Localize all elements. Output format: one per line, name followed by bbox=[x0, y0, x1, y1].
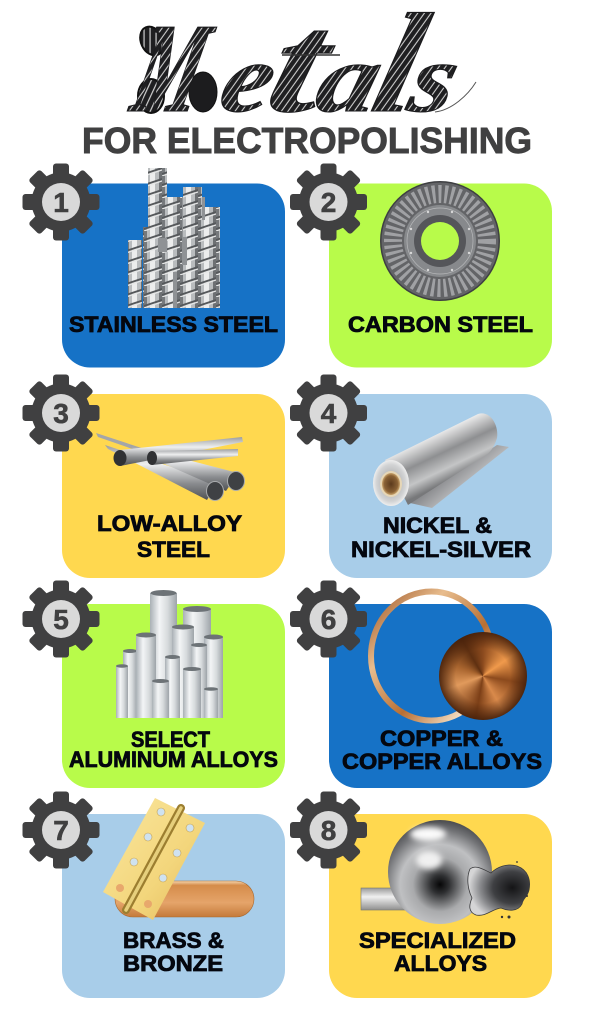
label bbox=[123, 928, 224, 976]
panel 7: brass and bronze bbox=[22, 792, 285, 998]
icon: rebar bundle bbox=[128, 168, 220, 308]
title: Metals: s bbox=[398, 23, 471, 133]
label: STEEL bbox=[137, 537, 210, 562]
label: ALLOYS bbox=[394, 951, 487, 976]
label: STAINLESS STEEL bbox=[69, 312, 278, 337]
label: SPECIALIZED bbox=[359, 928, 516, 953]
panel 2: carbon steel bbox=[290, 164, 552, 368]
label bbox=[342, 726, 542, 774]
label bbox=[69, 727, 278, 772]
label: COPPER ALLOYS bbox=[342, 749, 542, 774]
label: BRASS & bbox=[123, 928, 224, 953]
gear badge 5 bbox=[22, 580, 100, 658]
panel 4: nickel and nickel-silver bbox=[290, 374, 552, 578]
gear badge 4 bbox=[290, 374, 367, 452]
label: LOW-ALLOY bbox=[97, 511, 242, 536]
gear badge 8: 8 bbox=[321, 815, 336, 846]
gear badge 5: 5 bbox=[53, 604, 69, 635]
gear badge 1: 1 bbox=[53, 187, 69, 218]
label: CARBON STEEL bbox=[348, 312, 533, 337]
gear badge 7 bbox=[22, 792, 100, 868]
panel 8: specialized alloys bbox=[290, 792, 552, 998]
icon: metal sphere and molten blob bbox=[361, 820, 530, 924]
label: BRONZE bbox=[123, 951, 223, 976]
icon: foil roll bbox=[373, 413, 509, 508]
title: Metals bbox=[119, 0, 480, 143]
icon: bronze bar and brass hinge bbox=[103, 798, 254, 920]
panel 6: copper and copper alloys bbox=[290, 580, 552, 788]
icon: steel disc bbox=[380, 181, 500, 301]
gear badge 6: 6 bbox=[321, 604, 336, 635]
icon: aluminum tubes bbox=[116, 590, 223, 718]
gear badge 3: 3 bbox=[53, 398, 69, 429]
subtitle: for electropolishing: FOR ELECTROPOLISHING bbox=[82, 120, 532, 161]
gear badge 4: 4 bbox=[321, 398, 337, 429]
panel 5: select aluminum alloys bbox=[22, 580, 285, 788]
gear badge 2: 2 bbox=[321, 187, 336, 218]
label bbox=[351, 513, 531, 562]
icon: copper ring and disc bbox=[371, 592, 527, 720]
label: SELECT bbox=[131, 727, 211, 752]
label bbox=[359, 928, 516, 976]
gear badge 3 bbox=[22, 374, 100, 452]
label: COPPER & bbox=[380, 726, 503, 751]
panel 1: stainless steel bbox=[22, 164, 285, 368]
label: NICKEL-SILVER bbox=[351, 537, 531, 562]
label bbox=[97, 511, 242, 562]
title: Metals: M bbox=[120, 0, 225, 140]
icon: steel tubes bbox=[96, 433, 244, 500]
gear badge 8 bbox=[290, 792, 367, 868]
gear badge 6 bbox=[290, 580, 367, 658]
panel 3: low-alloy steel bbox=[22, 374, 285, 578]
title: Metals: a bbox=[307, 23, 394, 133]
gear badge 2 bbox=[290, 164, 367, 240]
label: NICKEL & bbox=[383, 513, 492, 538]
gear badge 7: 7 bbox=[53, 815, 69, 846]
gear badge 1 bbox=[22, 164, 100, 240]
title: Metals: e bbox=[211, 23, 288, 133]
label: ALUMINUM ALLOYS bbox=[69, 747, 278, 772]
